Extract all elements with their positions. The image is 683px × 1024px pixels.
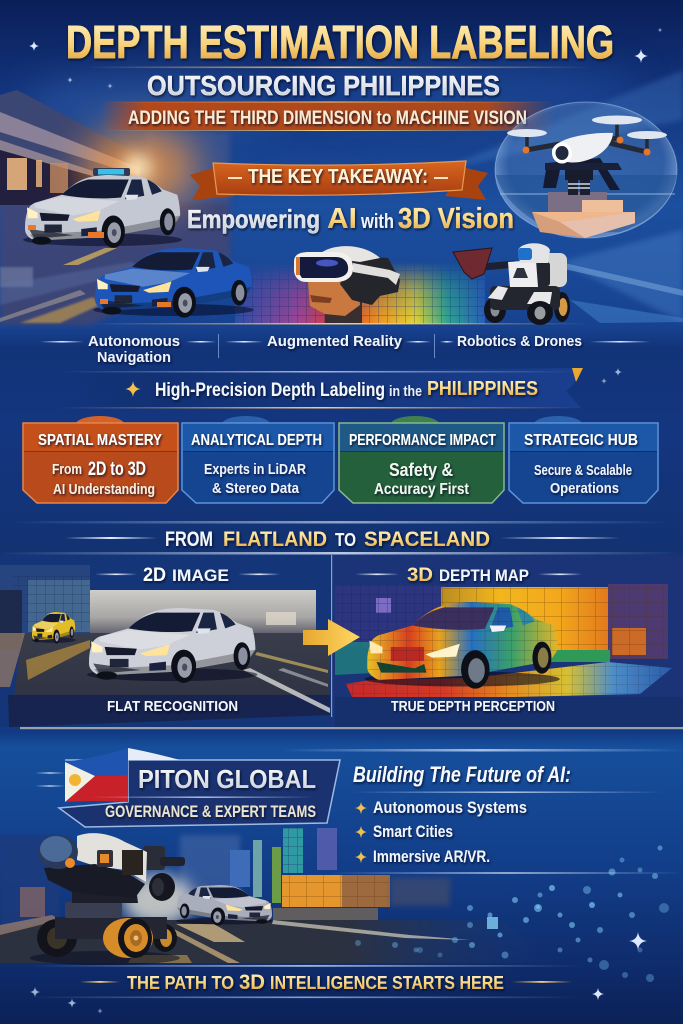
card: analytical depth (182, 416, 334, 503)
ribbon: key takeaway: THE KEY TAKEAWAY: (248, 166, 428, 188)
divider bands (20, 727, 683, 752)
card: performance impact: Accuracy First (374, 481, 469, 498)
section heading: flatland to spaceland: FLATLAND (223, 528, 327, 551)
icon: silver self-driving car (23, 168, 182, 248)
banner: piton global with flag (35, 748, 340, 827)
panel title: IMAGE (172, 566, 229, 585)
icon: depth mapped car (365, 602, 560, 689)
icon: white sedan (87, 608, 257, 683)
icon: stacked boxes (532, 192, 635, 238)
card: strategic hub: STRATEGIC HUB (524, 432, 638, 449)
flag (65, 748, 180, 802)
feature labels row: Augmented Reality (267, 333, 403, 350)
card: spatial mastery: AI Understanding (53, 481, 155, 498)
text block: building the future of AI (353, 762, 663, 866)
list item: Autonomous Systems (373, 798, 527, 817)
card: spatial mastery: From (52, 461, 82, 478)
icon: blue car (93, 248, 254, 318)
icon: person with vr headset (294, 246, 400, 323)
section heading: flatland to spaceland: SPACELAND (364, 528, 490, 551)
icon: drone in bubble (495, 102, 677, 238)
feature labels row: Robotics & Drones (457, 333, 582, 350)
icon: camera robot rover (30, 833, 185, 965)
list item (355, 822, 453, 841)
headline: empowering AI with 3D vision: 3D Vision (398, 203, 514, 235)
stars decoration lower (30, 932, 647, 1014)
headline: empowering AI with 3D vision: Empowering (187, 204, 320, 234)
card: performance impact: PERFORMANCE IMPACT (349, 432, 496, 449)
arrow: 2D to 3D (303, 619, 360, 656)
text block: building the future of AI: Building The Future of AI: (353, 762, 571, 787)
scene: rainbow depth grid (90, 262, 590, 324)
panel: 3D depth map (331, 555, 683, 727)
panel title (95, 565, 280, 586)
headline: empowering AI with 3D vision (187, 203, 514, 235)
footer: the path to 3D intelligence: 3D (239, 971, 265, 994)
road (0, 633, 330, 727)
card: spatial mastery: SPATIAL MASTERY (38, 432, 162, 449)
caption: FLAT RECOGNITION (107, 698, 238, 715)
banner: piton global with flag: PITON GLOBAL (138, 764, 316, 794)
ribbon: adding the third dimension (100, 102, 555, 131)
subtitle: OUTSOURCING PHILIPPINES (147, 70, 500, 101)
banner: high precision depth labeling: High-Precision Depth Labeling (155, 380, 385, 401)
panel title: DEPTH MAP (439, 566, 529, 585)
section heading: flatland to spaceland: TO (335, 530, 356, 550)
card: strategic hub: Operations (550, 480, 619, 497)
back wall (90, 590, 316, 635)
banner: high precision depth labeling: in the (389, 383, 422, 400)
ribbon: adding the third dimension: ADDING THE THIRD DIMENSION to MACHINE VISION (128, 108, 527, 129)
section heading: flatland to spaceland (10, 521, 670, 551)
city backdrop (0, 565, 90, 650)
card: performance impact (339, 416, 504, 503)
card: strategic hub: Secure & Scalable (534, 463, 632, 479)
particles (355, 846, 669, 982)
feature labels row (40, 333, 650, 366)
caption: TRUE DEPTH PERCEPTION (391, 698, 555, 715)
card: analytical depth: & Stereo Data (212, 480, 300, 497)
icon: service robot (453, 243, 570, 325)
footer: the path to 3D intelligence: INTELLIGENCE STARTS HERE (270, 973, 504, 993)
card: spatial mastery (23, 416, 178, 503)
card: performance impact: Safety & (389, 460, 453, 480)
panel: 2D image (0, 552, 683, 727)
rainbow floor (335, 642, 683, 727)
list item: Immersive AR/VR. (373, 847, 490, 866)
panel title (355, 565, 582, 586)
footer: the path to 3D intelligence: THE PATH TO (127, 973, 234, 993)
ribbon: key takeaway (190, 161, 488, 200)
banner: piton global with flag: GOVERNANCE & EXPERT TEAMS (105, 803, 316, 821)
panel title: 2D (143, 565, 166, 586)
icon: yellow car (31, 612, 76, 644)
banner: high precision depth labeling (59, 368, 583, 408)
feature labels row: Navigation (97, 349, 171, 366)
card: analytical depth: ANALYTICAL DEPTH (191, 432, 322, 449)
card: strategic hub (509, 416, 658, 503)
footer: the path to 3D intelligence (30, 965, 580, 998)
icon: drone (507, 116, 667, 195)
list item: Smart Cities (373, 822, 453, 841)
pixel wall left (335, 585, 445, 647)
headline: empowering AI with 3D vision: AI (327, 203, 357, 235)
scene: city and road backdrop (0, 90, 683, 325)
banner: high precision depth labeling: PHILIPPINES (427, 378, 538, 400)
card: spatial mastery: 2D to 3D (88, 459, 146, 480)
scene: bottom city and road (0, 828, 560, 975)
pixel wall right (441, 584, 668, 662)
stars decoration (29, 28, 662, 384)
card: analytical depth: Experts in LiDAR (204, 461, 306, 478)
feature labels row: Autonomous (88, 333, 180, 350)
section heading: flatland to spaceland: FROM (165, 528, 213, 551)
headline: empowering AI with 3D vision: with (360, 211, 394, 233)
icon: silver car on road (176, 885, 273, 926)
panel title: 3D (407, 565, 433, 586)
